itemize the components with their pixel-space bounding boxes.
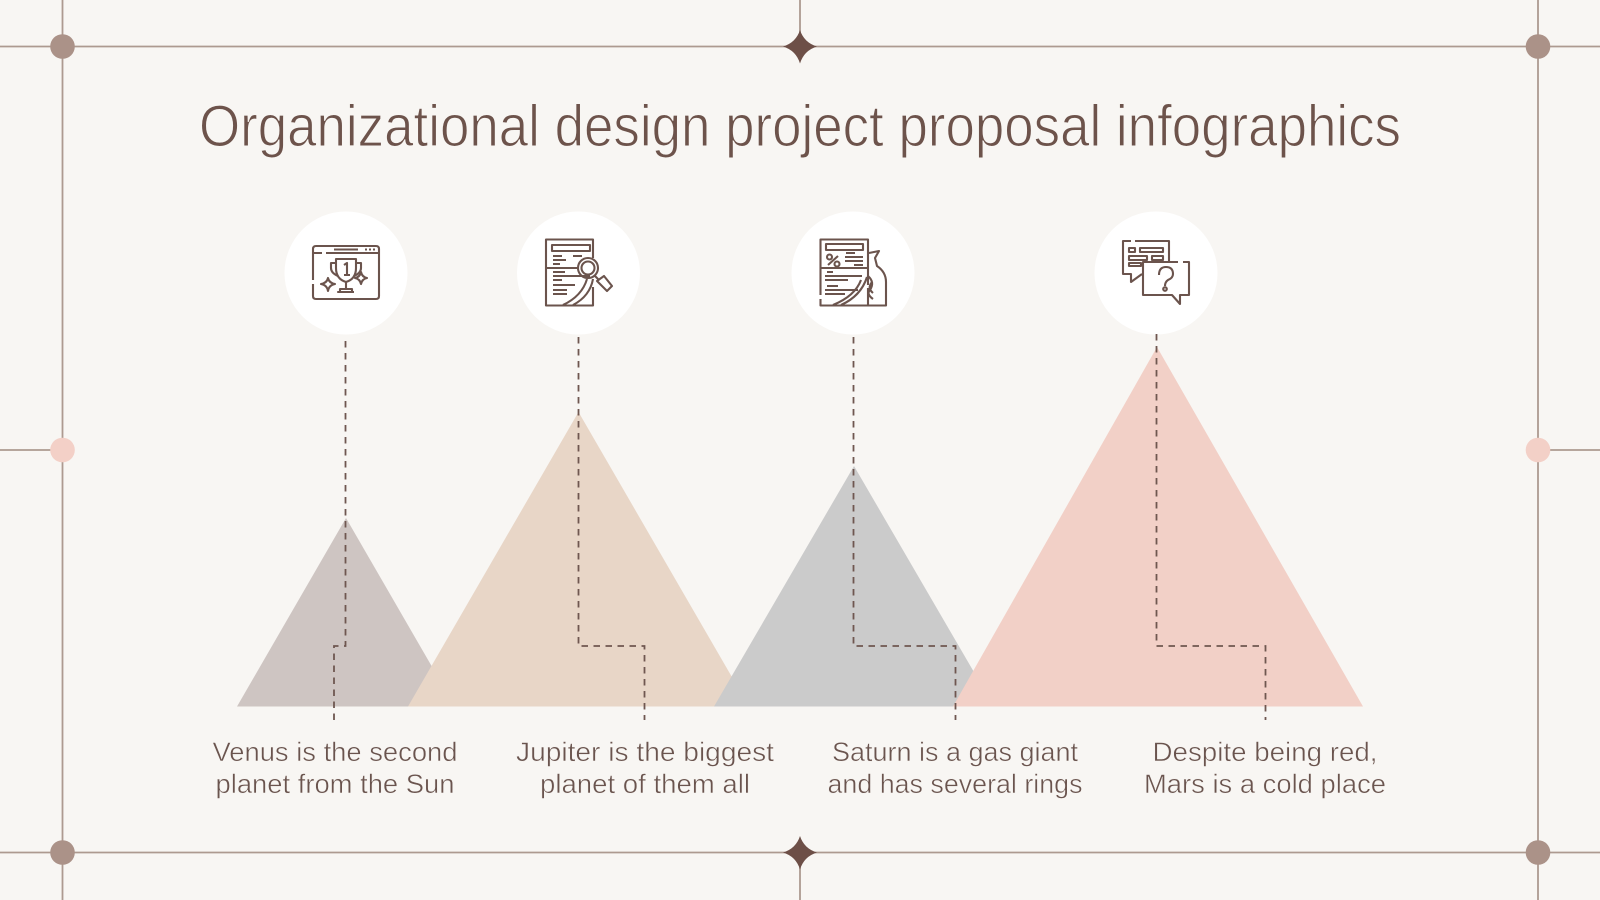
dashed connector: Jupiter [578, 337, 644, 720]
frame corner dot: top left [50, 34, 75, 59]
dashed connector: Venus [334, 337, 346, 720]
caption: Venus: planet from the Sun [216, 769, 454, 799]
caption: Mars: Mars is a cold place [1144, 769, 1386, 799]
icon badge: trophy [284, 212, 408, 334]
frame corner dot: top right [1526, 34, 1550, 59]
star ornament: top [783, 30, 817, 64]
caption: Venus [212, 737, 458, 799]
star ornament: bottom [783, 836, 817, 870]
title: Organizational design project proposal infographics [199, 94, 1401, 159]
triangle chart [237, 347, 1363, 706]
caption: Venus: Venus is the second [212, 737, 458, 767]
icon: trophy in browser window [313, 246, 379, 299]
icon: speech bubbles with question mark [1123, 241, 1189, 304]
frame corner dot: bottom left [50, 840, 75, 865]
caption: Saturn: Saturn is a gas giant [832, 737, 1078, 767]
triangle: Mars [953, 347, 1363, 706]
caption: Jupiter: planet of them all [540, 769, 750, 799]
dashed connector: Mars [1156, 334, 1266, 720]
caption: Mars [1144, 737, 1386, 799]
icon badge: document search [517, 212, 640, 334]
icon badge: question chat [1094, 212, 1218, 334]
frame mid dot: left [50, 438, 75, 462]
triangle: Jupiter [408, 412, 749, 706]
icon: document with magnifier [546, 240, 612, 306]
caption: Jupiter: Jupiter is the biggest [516, 737, 775, 767]
caption: Jupiter [516, 737, 775, 799]
caption: Saturn [828, 737, 1082, 799]
frame mid dot: right [1526, 438, 1550, 462]
caption: Saturn: and has several rings [828, 769, 1082, 799]
icon: percent document with money bag [820, 240, 886, 306]
caption: Mars: Despite being red, [1152, 737, 1378, 767]
dashed connector: Saturn [854, 337, 956, 720]
triangle: Venus [237, 518, 455, 706]
frame corner dot: bottom right [1526, 840, 1550, 865]
triangle: Saturn [714, 466, 994, 706]
icon badge: percent document and money bag [792, 212, 914, 334]
